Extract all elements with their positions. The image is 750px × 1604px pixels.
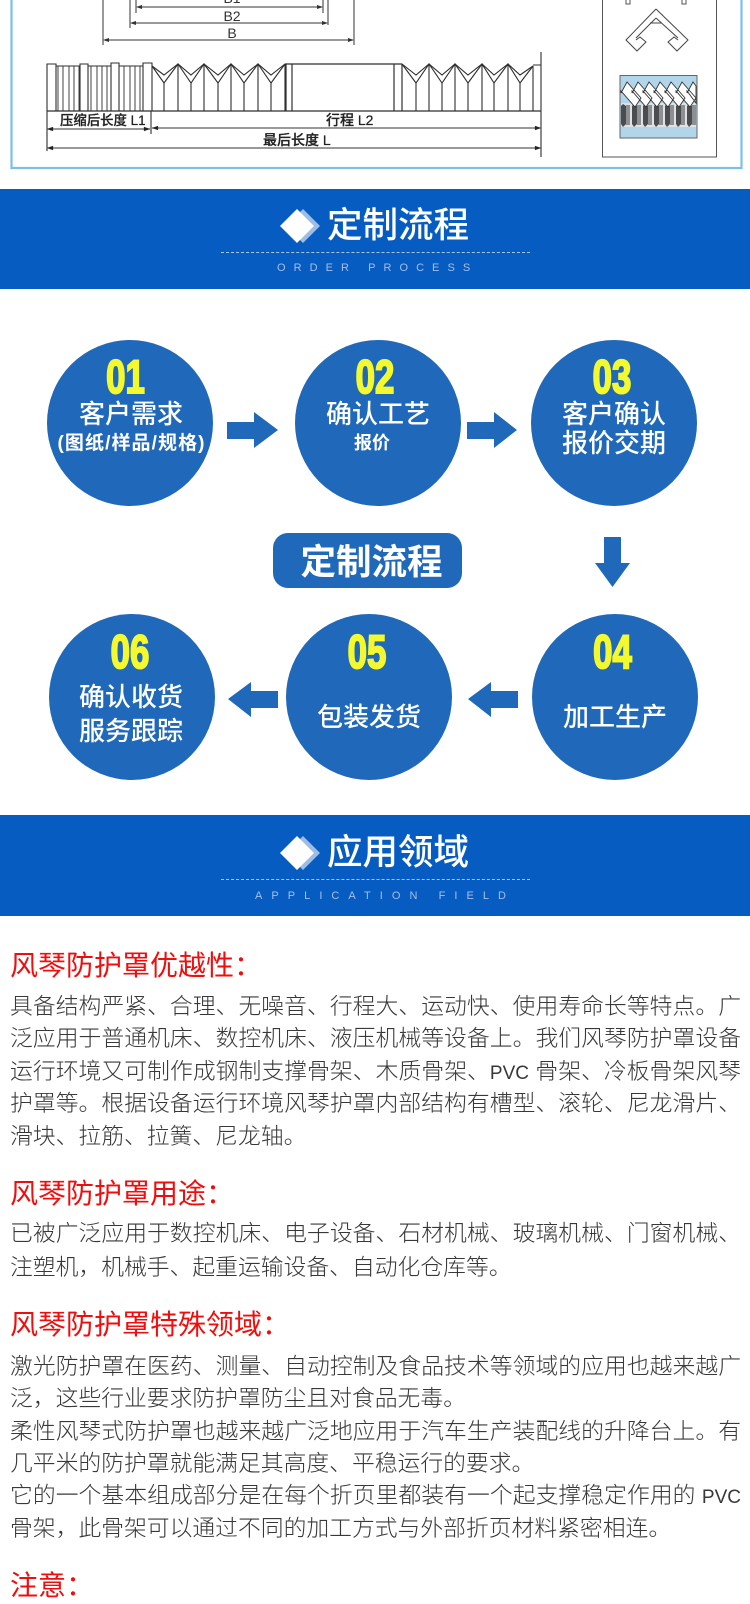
text block: special fields	[10, 1309, 741, 1541]
paragraph: uses: 已被广泛应用于数控机床、电子设备、石材机械、玻璃机械、门窗机械、	[10, 1220, 741, 1246]
step 02	[295, 340, 461, 506]
step 01: 客户需求	[79, 399, 183, 429]
header: order process	[0, 189, 750, 289]
length dimensions L1 L2 L: 最后长度 L	[263, 132, 331, 148]
length dimensions L1 L2 L: 压缩后长度 L1	[60, 113, 146, 128]
arrow: 04 to 05	[468, 682, 518, 717]
step 01: 01	[106, 351, 145, 403]
paragraph: uses	[10, 1220, 741, 1280]
icon: chevron profile	[626, 9, 688, 51]
subheading: ORDER PROCESS	[277, 262, 478, 274]
paragraph: advantages	[10, 993, 741, 1149]
paragraph: advantages: 具备结构严紧、合理、无噪音、行程大、运动快、使用寿命长等特点。广	[10, 993, 741, 1019]
step 04: 加工生产	[563, 702, 667, 732]
paragraph: special fields	[10, 1353, 741, 1541]
step 02: 报价	[354, 433, 390, 453]
subheading: APPLICATION FIELD	[255, 890, 515, 902]
arrow: 03 to 04	[595, 537, 630, 587]
paragraph: uses: 注塑机，机械手、起重运输设备、自动化仓库等。	[10, 1254, 512, 1280]
side panel: cross-section profiles	[602, 0, 716, 157]
icon: folded bellows section	[620, 76, 697, 138]
heading: special fields: 风琴防护罩特殊领域：	[10, 1309, 290, 1340]
step 06: 确认收货	[79, 682, 183, 712]
step 03	[531, 340, 697, 506]
step 06	[49, 614, 215, 780]
badge: process title	[273, 533, 462, 588]
step 03: 客户确认	[562, 399, 666, 429]
step 04	[532, 614, 698, 780]
step 06: 服务跟踪	[79, 716, 183, 746]
icon: diamond	[280, 836, 320, 870]
panel: technical diagram	[10, 0, 743, 170]
icon: diamond	[280, 209, 320, 243]
heading: notes: 注意：	[10, 1570, 94, 1601]
paragraph: special fields: 泛，这些行业要求防护罩防尘且对食品无毒。	[10, 1385, 466, 1411]
width dimension lines B B1 B2: B2	[223, 8, 241, 24]
step 05	[286, 614, 452, 780]
heading: 定制流程	[327, 205, 469, 245]
paragraph: advantages: 泛应用于普通机床、数控机床、液压机械等设备上。我们风琴防护罩设备	[10, 1025, 741, 1051]
heading: 应用领域	[327, 832, 469, 872]
paragraph: advantages: 运行环境又可制作成钢制支撑骨架、木质骨架、PVC 骨架、冷板骨架风琴	[10, 1058, 741, 1084]
paragraph: special fields: 它的一个基本组成部分是在每个折页里都装有一个起支撑稳定作用的 PVC	[10, 1482, 741, 1508]
bellows side view	[47, 52, 541, 157]
step 05: 05	[348, 626, 386, 678]
step 04: 04	[593, 626, 632, 678]
flow chart: customization process	[47, 340, 698, 780]
paragraph: special fields: 几平米的防护罩就能满足其高度、平稳运行的要求。	[10, 1450, 534, 1476]
step 03: 报价交期	[562, 428, 666, 458]
paragraph: special fields: 激光防护罩在医药、测量、自动控制及食品技术等领域的应用也越来越广	[10, 1353, 741, 1379]
arrow: 05 to 06	[228, 682, 278, 717]
paragraph: special fields: 骨架，此骨架可以通过不同的加工方式与外部折页材料紧密相连。	[10, 1515, 671, 1541]
step 06: 06	[111, 626, 149, 678]
arrow: 02 to 03	[467, 412, 517, 448]
step 03: 03	[593, 351, 631, 403]
length dimensions L1 L2 L: 行程 L2	[326, 112, 374, 128]
length dimensions L1 L2 L	[47, 112, 541, 150]
step 02: 02	[356, 351, 394, 403]
text block: uses	[10, 1178, 741, 1280]
width dimension lines B B1 B2: B	[227, 25, 237, 41]
heading: advantages: 风琴防护罩优越性：	[10, 950, 262, 981]
heading: uses: 风琴防护罩用途：	[10, 1178, 234, 1209]
width dimension lines B B1 B2	[103, 0, 354, 45]
step 05: 包装发货	[317, 702, 421, 732]
header: application field	[0, 815, 750, 916]
badge: process title: 定制流程	[300, 542, 443, 582]
paragraph: advantages: 护罩等。根据设备运行环境风琴护罩内部结构有槽型、滚轮、尼龙滑片、	[10, 1090, 741, 1116]
arrow: 01 to 02	[227, 412, 278, 448]
step 01: (图纸/样品/规格)	[58, 431, 204, 454]
paragraph: special fields: 柔性风琴式防护罩也越来越广泛地应用于汽车生产装配线的升降台上。有	[10, 1418, 741, 1444]
paragraph: advantages: 滑块、拉筋、拉簧、尼龙轴。	[10, 1123, 306, 1149]
step 01	[47, 340, 213, 506]
step 02: 确认工艺	[326, 399, 430, 429]
panel border	[12, 0, 742, 168]
text block: advantages	[10, 950, 741, 1149]
